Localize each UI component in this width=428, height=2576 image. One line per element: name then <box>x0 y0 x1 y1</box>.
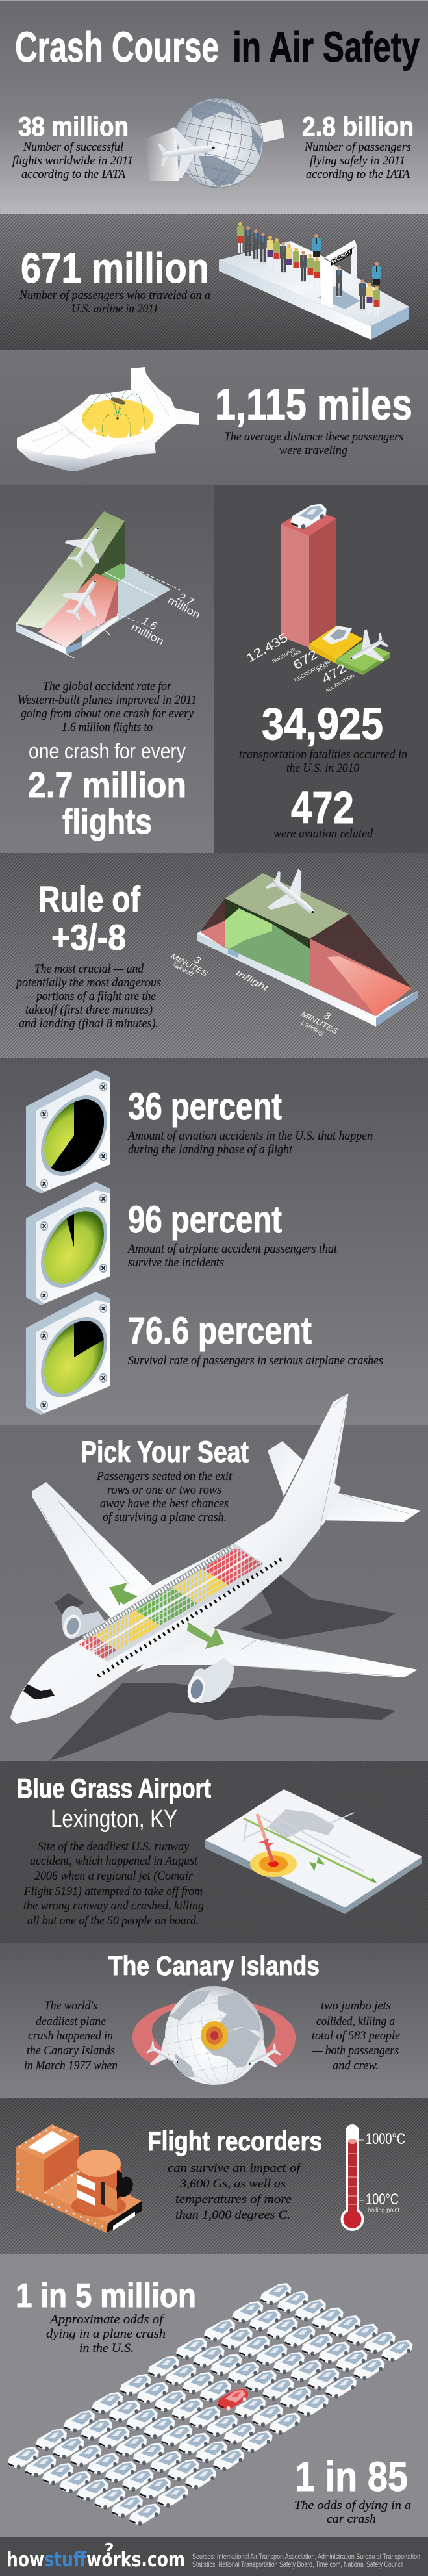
stat: 36 percent: Amount of aviation accidents in the U.S. that happen <box>127 1129 373 1143</box>
stat: 1,115 miles: The average distance these passengers <box>224 430 403 444</box>
stat: 34,925 fatalities: 34,925 <box>262 698 383 749</box>
stat: 1 in 85 <box>294 2453 411 2526</box>
stat: 472 aviation related: 472 <box>291 782 354 833</box>
label: all aviation: ALL AVIATION <box>325 672 355 694</box>
text: seat description: rows or one or two rows <box>107 1483 221 1497</box>
stat: 34,925 fatalities: the U.S. in 2010 <box>286 761 359 775</box>
stat: 38 million flights: 38 million <box>18 111 129 142</box>
title <box>15 23 420 71</box>
text: right description: — both passengers <box>312 2044 399 2058</box>
label: all aviation <box>320 661 355 694</box>
stat: 96 percent: 96 percent <box>128 1199 282 1241</box>
panel: odds of dying <box>0 2254 428 2537</box>
label: recreational boats: 672 <box>291 648 320 672</box>
panel: transportation fatalities <box>214 485 428 853</box>
stat: 2.8 billion passengers: according to the IATA <box>306 168 410 181</box>
stat: 1 in 5 million: 1 in 5 million <box>16 2277 196 2315</box>
icon: crash site <box>201 2021 228 2050</box>
stat: 1 in 85: car crash <box>327 2512 376 2526</box>
label: 1.6 million <box>129 615 166 648</box>
label: inflight: Inflight <box>234 967 271 993</box>
stat: 34,925 fatalities <box>239 698 407 775</box>
panel: header and worldwide statistics <box>0 0 428 214</box>
text: left description <box>24 1999 118 2072</box>
logo: howstuffworks.com <box>6 2540 185 2571</box>
label: 100 C boiling point: boiling point <box>368 2207 399 2214</box>
text: left description: The world's <box>44 1999 97 2013</box>
panel: rule of +3/-8 <box>0 853 428 1058</box>
text: recorder description: temperatures of more <box>175 2193 292 2206</box>
shadow: plane shadow <box>49 1574 396 1761</box>
chart: thermometer <box>340 2124 405 2231</box>
stat: 38 million flights: Number of successful <box>23 140 123 154</box>
panel: global accident rate <box>0 485 214 853</box>
panel: Blue Grass Airport <box>0 1761 428 1943</box>
text: rule description <box>15 962 161 1030</box>
illustration: isometric US map <box>17 367 199 471</box>
label: 8 minutes landing: 8 <box>322 1010 333 1023</box>
arrow: wing exit <box>109 1583 138 1606</box>
heading: pick your seat: Pick Your Seat <box>81 1435 249 1469</box>
stat: 671 million passengers <box>19 244 210 316</box>
text: recorder description: can survive an impact of <box>168 2162 302 2175</box>
text: accident description: accident, which happened in August <box>30 1854 198 1868</box>
stat: 671 million passengers: 671 million <box>21 244 209 292</box>
label: 3 minutes takeoff: 3 <box>192 954 203 967</box>
label: 1.6 million: million <box>129 622 166 648</box>
heading: Blue Grass Airport: Lexington, KY <box>51 1805 177 1833</box>
stat: 472 aviation related <box>273 782 373 841</box>
heading: rule of +3/-8: Rule of <box>38 878 140 919</box>
illustration: airport runway map <box>205 1789 422 1914</box>
stat: 2.8 billion passengers: flying safely in 2011 <box>310 154 405 168</box>
text: recorder description <box>168 2162 302 2222</box>
stat: 671 million passengers: U.S. airline in 2011 <box>71 302 158 316</box>
panel: survival percentages <box>0 1058 428 1425</box>
stat: 38 million flights: flights worldwide in 2011 <box>12 154 133 168</box>
heading: flight recorders: Flight recorders <box>147 2126 322 2156</box>
text: accident rate description: The global accident rate for <box>43 680 172 693</box>
chart: fatalities by transport type <box>244 504 394 694</box>
icon: crash blast <box>250 1851 297 1877</box>
stat: one crash for every 2.7 million flights: 2.7 million <box>28 765 186 805</box>
icon: car <box>290 504 327 529</box>
sign: security: SECURITY <box>330 249 353 265</box>
text: rule description: takeoff (first three minutes) <box>25 1003 153 1017</box>
text: sources <box>192 2552 420 2569</box>
text: right description: two jumbo jets <box>321 1999 391 2013</box>
diagram: flight phases <box>170 860 418 1038</box>
label: recreational boats: RECREATIONAL <box>294 658 331 683</box>
text: seat description <box>96 1470 233 1524</box>
stat: 1 in 5 million: in the U.S. <box>79 2341 134 2355</box>
text: recorder description: 3,600 Gs, as well as <box>179 2177 286 2191</box>
text: right description: total of 583 people <box>312 2029 400 2043</box>
illustration: globe with colliding jets <box>132 1978 296 2093</box>
logo: howstuffworks.com: ? <box>104 2540 114 2560</box>
stat: 96 percent: survive the incidents <box>128 1256 224 1269</box>
label: 100 C boiling point: 100°C <box>366 2191 399 2208</box>
text: right description: collided, killing a <box>316 2015 395 2028</box>
text: accident description: the wrong runway and crashed, killing <box>23 1899 204 1913</box>
stat: 36 percent <box>127 1086 373 1156</box>
stat: 96 percent: Amount of airplane accident passengers that <box>127 1242 338 1256</box>
cabin: seat cutaway <box>78 1543 263 1662</box>
illustration: airplane cutaway <box>10 1393 421 1724</box>
stat: 1 in 85: 1 in 85 <box>295 2453 408 2500</box>
text: right description: and crew. <box>333 2059 379 2072</box>
stat: 96 percent <box>127 1199 338 1269</box>
panel: airport security <box>0 214 428 350</box>
label: 1000 C: 1000°C <box>366 2130 405 2148</box>
text: left description: crash happened in <box>28 2029 113 2043</box>
icon: boat <box>322 626 352 644</box>
chart: grid of cars with one red car <box>8 2283 412 2526</box>
text: accident description: Flight 5191) attempted to take off from <box>23 1885 203 1898</box>
title: Crash Course <box>15 23 219 71</box>
stat: 38 million flights <box>12 111 133 181</box>
chart: flights per crash ramps <box>16 511 202 658</box>
label: 3 minutes takeoff: MINUTES <box>170 951 209 978</box>
text: accident rate description <box>18 680 197 734</box>
text: recorder description: than 1,000 degrees C. <box>175 2208 290 2222</box>
panel: flight recorders <box>0 2098 428 2254</box>
label: 2.7 million: 2.7 <box>175 590 195 609</box>
panel: pick your seat <box>0 1393 428 1761</box>
stat: 2.8 billion passengers: 2.8 billion <box>302 111 414 142</box>
label: passenger cars <box>244 631 302 665</box>
label: passenger cars: CARS <box>290 648 302 659</box>
text: accident description: 2006 when a regional jet (Comair <box>34 1869 194 1883</box>
icon: plane <box>341 624 394 675</box>
gauge: 36 percent <box>26 1070 110 1193</box>
stat: 36 percent: 36 percent <box>128 1086 282 1128</box>
stat: 34,925 fatalities: transportation fatalities occurred in <box>239 748 407 761</box>
text: left description: the Canary Islands <box>27 2044 115 2058</box>
heading: Blue Grass Airport: Blue Grass Airport <box>17 1773 211 1804</box>
label: 2.7 million <box>166 590 202 621</box>
text: accident description: all but one of the 50 people on board. <box>27 1914 199 1928</box>
text: rule description: potentially the most dangerous <box>15 976 161 989</box>
label: passenger cars: PASSENGER <box>271 646 297 665</box>
icon: globe with plane <box>144 90 284 196</box>
stat: 1 in 5 million <box>16 2277 196 2355</box>
text: right description <box>312 1999 400 2072</box>
stat: 1 in 5 million: dying in a plane crash <box>46 2327 166 2341</box>
heading: rule of +3/-8: +3/-8 <box>51 917 126 958</box>
stat: 2.8 billion passengers: Number of passengers <box>304 140 411 154</box>
stat: one crash for every 2.7 million flights: one crash for every <box>29 739 186 763</box>
text: rule description: and landing (final 8 minutes). <box>19 1017 158 1030</box>
label: 3 minutes takeoff: Takeoff <box>171 961 195 978</box>
logo: howstuffworks.com: howstuffworks.com <box>6 2548 185 2571</box>
heading: Canary Islands: The Canary Islands <box>108 1950 320 1981</box>
label: all aviation: 472 <box>320 661 349 686</box>
text: accident rate description: Western-built planes improved in 2011 <box>18 693 197 707</box>
gauge: 96 percent <box>26 1182 110 1305</box>
label: 1.6 million: 1.6 <box>140 615 159 633</box>
stat: 671 million passengers: Number of passengers who traveled on a <box>19 288 210 302</box>
stat: 472 aviation related: were aviation related <box>273 827 373 841</box>
label: recreational boats <box>291 648 333 683</box>
arrow: door exit <box>187 1622 224 1649</box>
label: passenger cars: 12,435 <box>244 631 290 665</box>
label: 8 minutes landing: Landing <box>300 1019 325 1038</box>
stat: 76.6 percent: 76.6 percent <box>128 1310 312 1352</box>
heading: Blue Grass Airport <box>17 1773 211 1833</box>
stat: 76.6 percent: Survival rate of passengers in serious airplane crashes <box>128 1354 383 1368</box>
panel: Canary Islands <box>0 1943 428 2098</box>
panel: average distance <box>0 350 428 485</box>
stat: 1,115 miles <box>215 380 412 457</box>
label: 100 C boiling point <box>366 2191 399 2214</box>
label: recreational boats: BOATS <box>316 660 333 673</box>
text: accident description: Site of the deadliest U.S. runway <box>38 1840 190 1854</box>
illustration: flight recorder box <box>16 2124 142 2233</box>
text: accident rate description: 1.6 million flights to <box>62 721 153 734</box>
text: rule description: The most crucial — and <box>34 962 144 976</box>
gauge: 76.6 percent <box>26 1292 110 1415</box>
heading: rule of +3/-8 <box>38 878 140 958</box>
stat: 76.6 percent <box>128 1310 383 1368</box>
text: left description: in March 1977 when <box>24 2059 118 2072</box>
stat: 1 in 85: The odds of dying in a <box>294 2499 411 2512</box>
text: seat description: of surviving a plane crash. <box>103 1511 227 1524</box>
footer <box>0 2537 428 2576</box>
text: accident description <box>23 1840 204 1928</box>
text: left description: deadliest plane <box>36 2015 106 2028</box>
stat: 38 million flights: according to the IATA <box>21 168 125 181</box>
text: accident rate description: going from about one crash for every <box>21 707 194 721</box>
label: 2.7 million: million <box>166 595 202 621</box>
text: seat description: away have the best chances <box>100 1497 229 1511</box>
stat: 1 in 5 million: Approximate odds of <box>49 2313 165 2327</box>
stat: one crash for every 2.7 million flights: flights <box>62 801 152 841</box>
stat: 36 percent: during the landing phase of a flight <box>128 1143 293 1156</box>
label: 8 minutes landing: MINUTES <box>300 1009 340 1036</box>
illustration: security checkpoint queue <box>219 222 409 340</box>
stat: 2.8 billion passengers <box>302 111 414 181</box>
stat: 1,115 miles: were traveling <box>279 444 347 457</box>
text: rule description: — portions of a flight are the <box>23 989 156 1003</box>
text: seat description: Passengers seated on the exit <box>96 1470 233 1483</box>
stat: one crash for every 2.7 million flights <box>28 739 186 841</box>
